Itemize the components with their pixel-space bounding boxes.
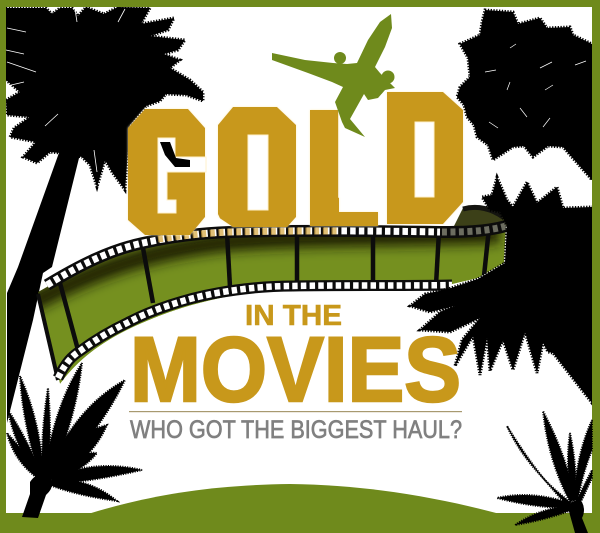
palm tree: top left xyxy=(6,7,203,423)
frond seen through G xyxy=(160,142,190,167)
palm tree: bottom left xyxy=(7,363,142,518)
frond slits xyxy=(485,44,586,128)
in the: IN THE xyxy=(245,300,342,332)
letter L: L xyxy=(303,78,382,262)
subtitle: WHO GOT THE BIGGEST HAUL? xyxy=(130,416,462,444)
film frames xyxy=(30,226,506,384)
movies: MOVIES xyxy=(130,319,461,421)
palm tree: bottom right xyxy=(497,411,592,533)
letter G: G xyxy=(125,80,214,265)
film curl end xyxy=(452,206,507,230)
bottom perforated band xyxy=(58,285,452,378)
green hill xyxy=(88,484,500,514)
letter counters xyxy=(158,122,434,213)
palm tree: top right xyxy=(457,10,592,180)
palm tree: middle right xyxy=(410,177,592,403)
title word: GOLD xyxy=(126,91,465,237)
top perforated band xyxy=(47,226,506,285)
rule xyxy=(129,411,462,412)
film left edge xyxy=(38,294,58,380)
airplane xyxy=(272,14,395,137)
film strip xyxy=(30,206,507,384)
letter O: O xyxy=(218,76,300,260)
letter D: D xyxy=(382,58,465,265)
frond slits xyxy=(6,9,125,172)
